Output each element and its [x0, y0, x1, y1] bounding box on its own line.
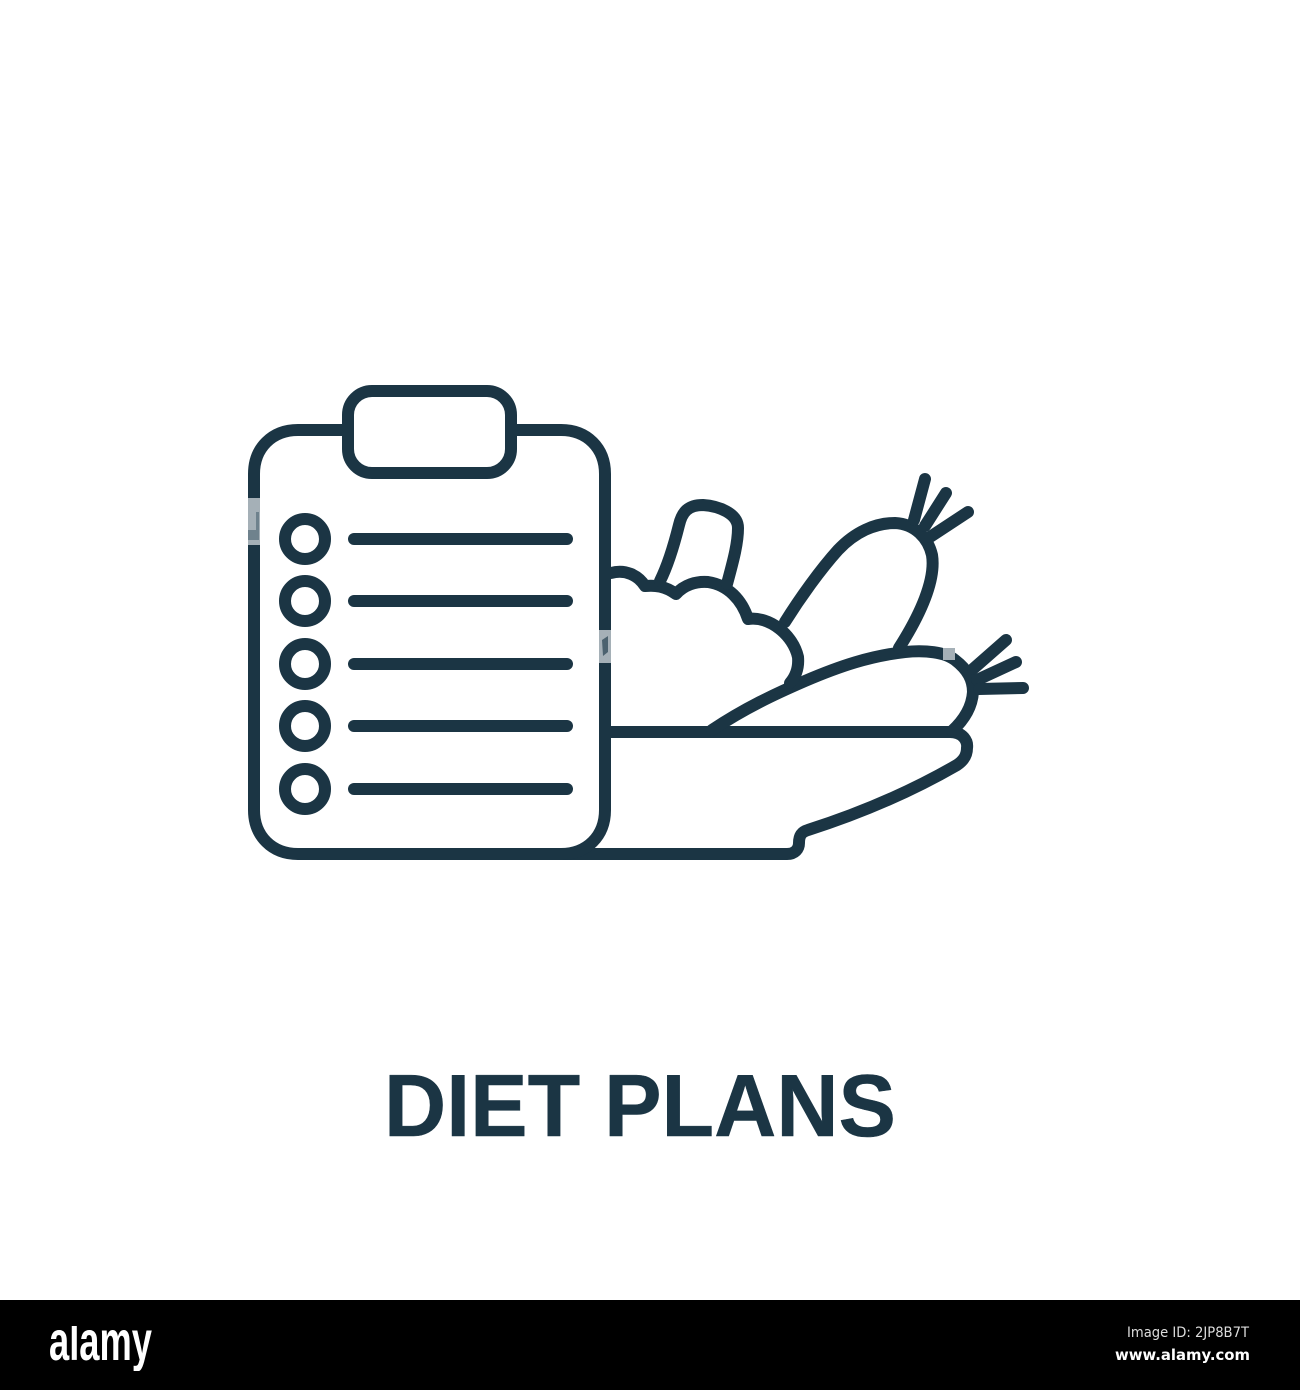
infographic canvas: [0, 385, 1300, 1390]
icon: broccoli: [611, 505, 798, 683]
checklist rows: [285, 519, 567, 809]
footer website: www.alamy.com: [1115, 1346, 1250, 1364]
watermark fragments: [248, 498, 955, 663]
clipboard clip: [348, 391, 511, 473]
clipboard board: [254, 430, 605, 854]
footer logo: alamy: [49, 1309, 152, 1372]
footer image id: Image ID: 2JP8B7T: [1127, 1325, 1249, 1341]
icon: diet plan clipboard with vegetables: [248, 391, 1023, 854]
icon: clipboard: [254, 391, 605, 854]
icon: back carrot: [785, 479, 968, 648]
icon: bowl: [561, 732, 967, 854]
title: DIET PLANS: [384, 1056, 896, 1155]
footer bar: [0, 1300, 1300, 1390]
icon: front carrot: [712, 640, 1023, 731]
